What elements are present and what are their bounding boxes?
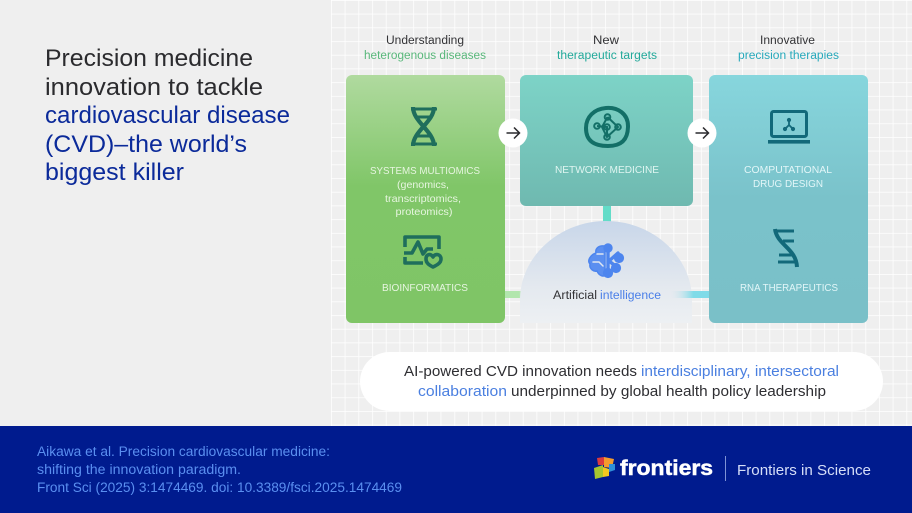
label: network medicine: NETWORK MEDICINE	[555, 164, 659, 176]
label: computational drug design	[744, 164, 832, 190]
panel: understanding diseases	[346, 75, 505, 323]
title: innovation to tackle	[45, 74, 263, 101]
column heading: innovative therapies	[738, 35, 839, 62]
callout	[360, 352, 883, 411]
label: artificial intelligence	[553, 290, 661, 302]
logo: frontiers: frontiers	[620, 457, 713, 480]
citation: shifting the innovation paradigm.	[37, 462, 241, 477]
label: artificial intelligence: intelligence	[600, 290, 661, 302]
column heading: innovative therapies: Innovative	[760, 35, 815, 47]
icon: bioinformatics monitor with heart	[404, 237, 441, 267]
icon: laptop	[768, 112, 810, 144]
label: bioinformatics: BIOINFORMATICS	[382, 282, 468, 294]
citation: Front Sci (2025) 3:1474469. doi: 10.3389/fsci.2025.1474469	[37, 480, 402, 495]
title: cardiovascular disease	[45, 102, 290, 129]
connector: green to AI	[505, 291, 533, 298]
column heading: understanding	[364, 35, 486, 62]
icon: AI brain	[589, 245, 622, 276]
callout: AI-powered CVD innovation needs	[404, 363, 637, 380]
label: systems multiomics: SYSTEMS MULTIOMICS	[370, 165, 480, 177]
column heading: new targets: therapeutic targets	[557, 50, 657, 62]
connector: AI to therapies	[670, 291, 709, 298]
connector: network medicine to AI	[603, 206, 611, 223]
icon: RNA strand	[775, 229, 797, 267]
citation: Aikawa et al. Precision cardiovascular medicine:	[37, 444, 330, 459]
panel: innovative therapies	[709, 75, 868, 323]
label: computational drug design: DRUG DESIGN	[753, 178, 823, 190]
citation	[37, 444, 402, 495]
label: RNA therapeutics: RNA THERAPEUTICS	[740, 282, 838, 294]
callout: underpinned by global health policy leadership	[511, 383, 826, 400]
callout: interdisciplinary, intersectoral	[641, 363, 839, 380]
arrow: targets to therapies	[688, 118, 716, 148]
icon: DNA helix	[411, 107, 437, 146]
title	[45, 45, 290, 186]
label: computational drug design: COMPUTATIONAL	[744, 164, 832, 176]
grid background	[331, 0, 912, 426]
icon: network in blob	[586, 108, 628, 146]
callout: collaboration	[418, 383, 507, 400]
title: biggest killer	[45, 159, 184, 186]
arrow: diseases to targets	[498, 118, 528, 148]
panel: network medicine	[520, 75, 693, 206]
label: systems multiomics: (genomics,	[397, 179, 449, 191]
label: artificial intelligence: Artificial	[553, 290, 597, 302]
label: systems multiomics: proteomics)	[396, 206, 452, 218]
footer band	[0, 426, 912, 513]
divider	[725, 456, 726, 481]
column heading: innovative therapies: precision therapies	[738, 50, 839, 62]
label: frontiers in science: Frontiers in Science	[737, 463, 871, 479]
column heading: understanding: Understanding	[386, 35, 464, 47]
panel: artificial intelligence dome	[520, 221, 692, 323]
column heading: new targets	[557, 35, 657, 62]
column heading: understanding: heterogenous diseases	[364, 50, 486, 62]
title: (CVD)–the world’s	[45, 131, 247, 158]
title: Precision medicine	[45, 45, 253, 72]
column heading: new targets: New	[593, 35, 620, 47]
label: systems multiomics	[370, 165, 480, 218]
label: systems multiomics: transcriptomics,	[385, 193, 461, 205]
